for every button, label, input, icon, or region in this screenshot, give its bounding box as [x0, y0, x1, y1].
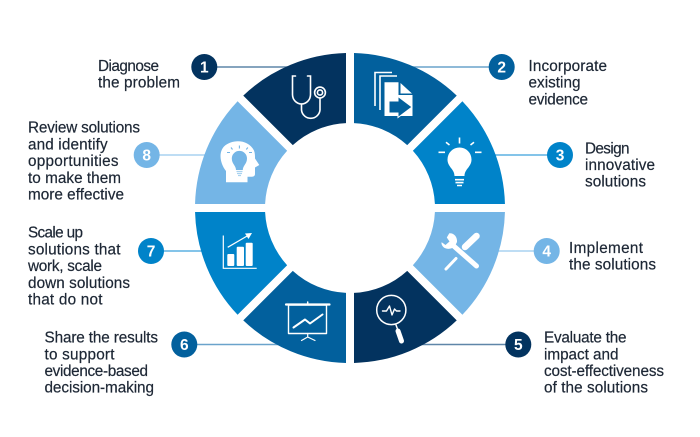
- text: step 8: [28, 120, 140, 204]
- number badge 7: [138, 238, 164, 264]
- segment 2: evidence: [354, 53, 457, 145]
- text: step 8: to make them: [28, 170, 121, 187]
- text: step 5: cost-effectiveness: [544, 363, 664, 380]
- text: step 8: opportunities: [28, 153, 119, 170]
- text: step 1: the problem: [98, 74, 180, 92]
- number badge 1: 1: [200, 59, 209, 76]
- text: step 1: [98, 58, 180, 92]
- text: step 7: down solutions: [28, 275, 130, 292]
- text: step 5: Evaluate the: [544, 330, 626, 347]
- text: step 4: Implement: [569, 240, 644, 257]
- icon: head with light bulb: [221, 141, 259, 182]
- text: step 8: Review solutions: [28, 120, 140, 137]
- icon: magnifier: [377, 295, 406, 341]
- segment 5: evaluate: [354, 271, 457, 363]
- text: step 8: and identify: [28, 136, 108, 153]
- number badge 5: [505, 332, 531, 358]
- segment 3: design: [413, 101, 505, 204]
- text: step 7: that do not: [28, 292, 103, 308]
- number badge 5: 5: [514, 337, 523, 354]
- text: step 1: Diagnose: [98, 58, 159, 75]
- text: step 7: [27, 225, 130, 308]
- number badge 2: 2: [497, 59, 506, 76]
- text: step 2: evidence: [528, 91, 588, 108]
- segment 6: share: [243, 271, 346, 363]
- number badge 6: 6: [180, 337, 189, 354]
- text: step 4: the solutions: [569, 257, 656, 274]
- number badge 3: [547, 142, 573, 168]
- text: step 6: Share the results: [44, 330, 158, 347]
- icon: documents: [375, 72, 412, 118]
- text: step 2: Incorporate: [528, 58, 607, 75]
- text: step 6: decision-making: [44, 380, 154, 397]
- text: step 7: work, scale: [27, 258, 102, 275]
- text: step 3: solutions: [585, 174, 646, 191]
- icon: wrench and screwdriver: [441, 233, 476, 269]
- number badge 4: 4: [542, 243, 551, 260]
- text: step 2: [528, 58, 607, 108]
- segment 4: implement: [413, 212, 505, 315]
- segment 7: scale: [195, 212, 287, 315]
- number badge 2: [489, 54, 515, 80]
- text: step 7: Scale up: [28, 225, 83, 242]
- text: step 6: [44, 330, 158, 397]
- text: step 6: evidence-based: [44, 363, 148, 380]
- number badge 8: [134, 142, 160, 168]
- number badge 1: [191, 54, 217, 80]
- text: step 8: more effective: [28, 186, 124, 204]
- icon: stethoscope: [292, 76, 325, 118]
- text: step 5: impact and: [544, 346, 618, 363]
- icon: light bulb: [438, 138, 482, 186]
- connector lines: [147, 67, 560, 344]
- text: step 7: solutions that: [28, 241, 121, 258]
- segment 1: diagnose: [243, 53, 346, 145]
- text: step 5: [544, 330, 664, 397]
- text: step 3: [585, 140, 655, 191]
- text: step 3: innovative: [585, 157, 655, 174]
- icon: bar chart: [223, 233, 257, 268]
- text: step 4: [569, 240, 656, 274]
- text: step 3: Design: [585, 140, 630, 157]
- number badge 8: 8: [142, 147, 151, 164]
- number badge 3: 3: [556, 147, 565, 164]
- text: step 6: to support: [44, 346, 115, 363]
- number badge 7: 7: [147, 243, 155, 260]
- text: step 5: of the solutions: [544, 380, 648, 397]
- number badge 4: [534, 238, 560, 264]
- number badge 6: [171, 332, 197, 358]
- text: step 2: existing: [528, 75, 580, 92]
- segment 8: review: [195, 101, 287, 204]
- icon: presentation board: [286, 302, 330, 340]
